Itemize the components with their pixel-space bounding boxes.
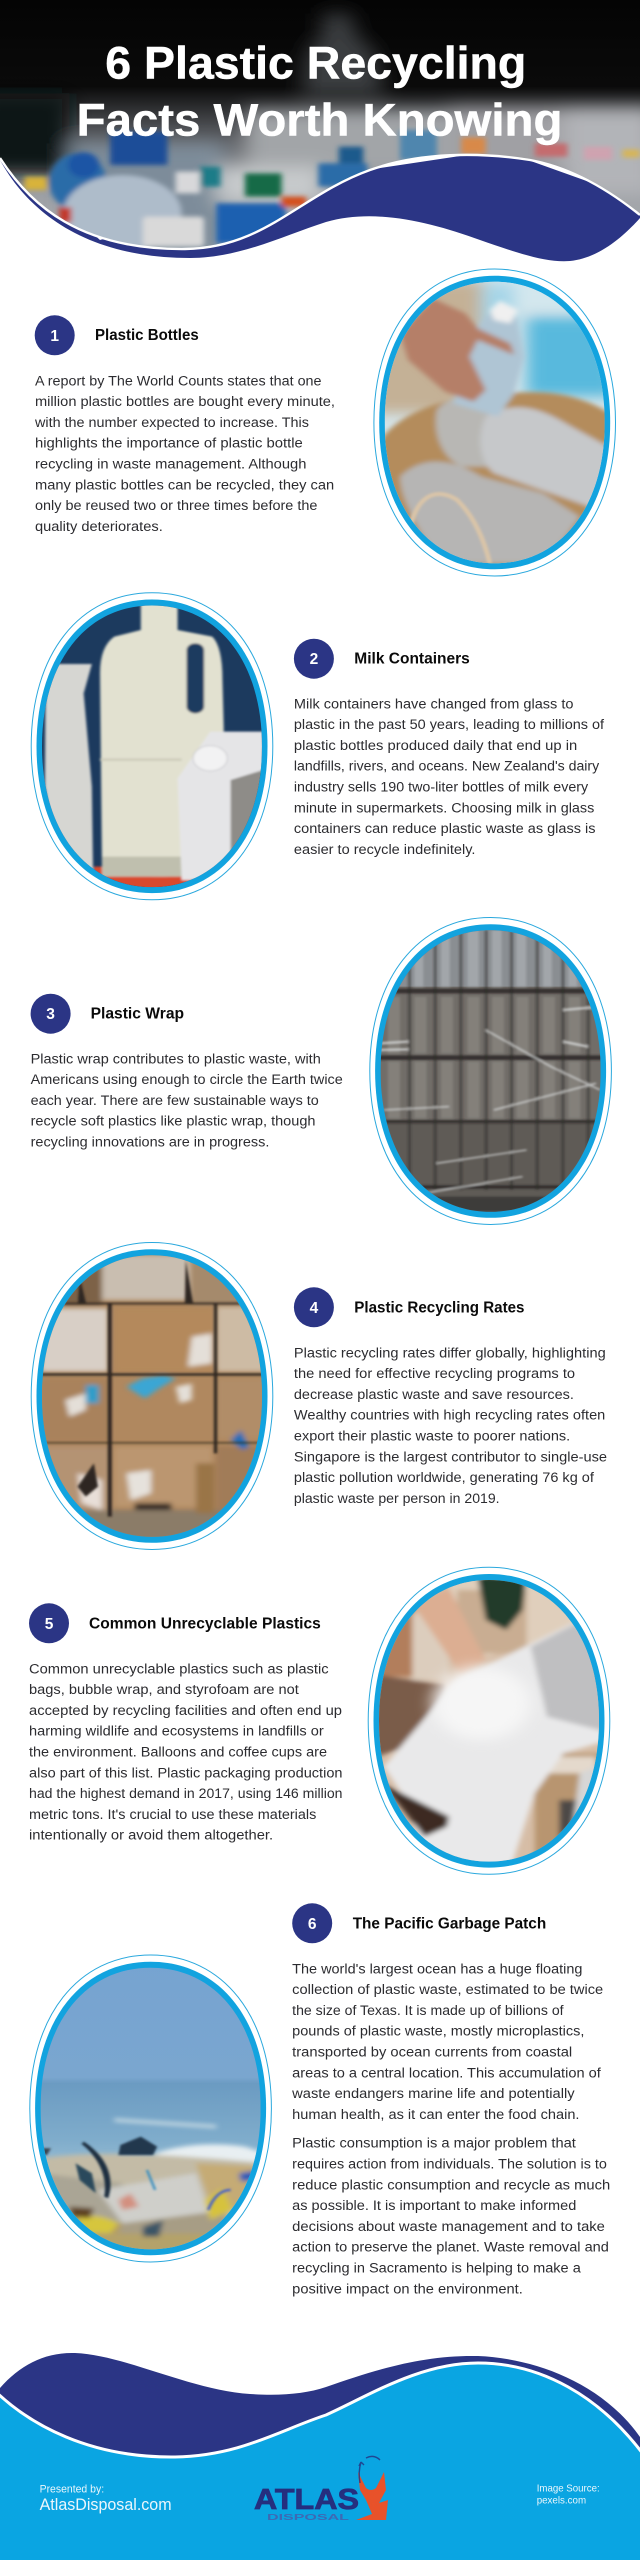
text block: plastic wrap: each year. There are few sustainable ways to — [31, 1093, 319, 1108]
heading: plastic recycling rates: Plastic Recycling Rates — [354, 1299, 524, 1316]
number badge 1 — [35, 315, 75, 355]
blue footer background — [0, 2363, 640, 2560]
number badge 6 — [292, 1903, 332, 1943]
text block: ocean plastic paragraph: The world's largest ocean has a huge floating — [292, 1961, 582, 1976]
panel: the pacific garbage patch — [24, 1903, 610, 2296]
text block: plastic bottles — [34, 373, 335, 534]
number badge 1: 1 — [50, 328, 59, 345]
number badge 4: 4 — [310, 1300, 319, 1317]
text block: plastic bottles: highlights the importance of plastic bottle — [35, 436, 303, 451]
text block: consumption paragraph: Plastic consumption is a major problem that — [292, 2136, 576, 2151]
text block: ocean plastic paragraph: areas to a central location. This accumulation of — [292, 2065, 601, 2080]
number badge 5: 5 — [45, 1616, 54, 1633]
panel: plastic bottles — [34, 269, 620, 576]
text block: milk containers: plastic bottles produced daily that end up in — [294, 738, 577, 753]
number badge 4 — [294, 1287, 334, 1327]
text block: plastic recycling rates: export their plastic waste to poorer nations. — [294, 1428, 570, 1444]
text block: plastic bottles: many plastic bottles can be recycled, they can — [35, 477, 334, 492]
text block: plastic recycling rates: the need for effective recycling programs to — [294, 1366, 575, 1381]
text block: ocean plastic paragraph: the size of Texas. It is made up of billions of — [292, 2003, 564, 2018]
text block: common unrecyclable plastics: had the highest demand in 2017, using 146 million — [29, 1786, 342, 1801]
text block: common unrecyclable plastics: bags, bubble wrap, and styrofoam are not — [29, 1682, 299, 1697]
text block: plastic wrap: recycle soft plastics like plastic wrap, though — [31, 1114, 315, 1129]
photo: plastic milk jugs — [24, 590, 286, 900]
text block: milk containers: Milk containers have changed from glass to — [294, 696, 574, 711]
text block: plastic wrap: Americans using enough to circle the Earth twice — [31, 1072, 343, 1087]
text block: plastic recycling rates: Singapore is the largest contributor to single-use — [294, 1449, 607, 1464]
text block: common unrecyclable plastics: accepted by recycling facilities and often end up — [29, 1703, 342, 1718]
text block: plastic recycling rates: decrease plastic waste and save resources. — [294, 1387, 574, 1402]
panel: milk containers — [24, 590, 604, 900]
text block: plastic bottles: quality deteriorates. — [35, 519, 163, 534]
text block: ocean plastic paragraph: waste endangers marine life and potentially — [291, 2086, 575, 2101]
image source credit: Image Source: — [537, 2483, 600, 2495]
text block: common unrecyclable plastics: metric tons. It's crucial to use these materials — [29, 1807, 317, 1822]
title: Facts Worth Knowing — [77, 95, 562, 146]
white header wave line — [0, 155, 640, 249]
logo subline: DISPOSAL — [267, 2513, 349, 2522]
text block: common unrecyclable plastics — [29, 1661, 342, 1843]
text block: milk containers: easier to recycle indefinitely. — [294, 842, 476, 857]
text block: ocean plastic paragraph — [291, 1961, 603, 2122]
text block: plastic recycling rates: plastic pollution worldwide, generating 76 kg of — [294, 1470, 594, 1485]
text block: milk containers: landfills, rivers, and oceans. New Zealand's dairy — [294, 759, 599, 774]
text block: consumption paragraph: reduce plastic consumption and recycle as much — [292, 2177, 610, 2192]
text block: plastic bottles: with the number expected to increase. This — [34, 415, 309, 430]
number badge 2: 2 — [310, 651, 318, 668]
header photo: plastic bottles — [0, 0, 640, 262]
text block: common unrecyclable plastics: also part of this list. Plastic packaging production — [29, 1765, 342, 1780]
number badge 3 — [31, 994, 71, 1034]
footer — [0, 2353, 640, 2560]
text block: consumption paragraph: positive impact on the environment. — [292, 2281, 523, 2296]
number badge 5 — [29, 1603, 69, 1643]
text block: milk containers: containers can reduce plastic waste as glass is — [294, 821, 596, 836]
text block: ocean plastic paragraph: pounds of plastic waste, mostly microplastics, — [292, 2024, 584, 2039]
photo: plastic waste on a beach — [24, 1953, 286, 2263]
image source credit — [537, 2483, 600, 2506]
text block: plastic wrap: recycling innovations are in progress. — [31, 1134, 269, 1150]
text block: plastic wrap: Plastic wrap contributes to plastic waste, with — [31, 1051, 321, 1066]
text block: consumption paragraph: decisions about waste management and to take — [292, 2219, 605, 2234]
text block: plastic wrap — [31, 1051, 343, 1150]
number badge 2 — [294, 639, 334, 679]
text block: consumption paragraph — [292, 2136, 610, 2296]
text block: plastic bottles: million plastic bottles are bought every minute, — [35, 394, 335, 409]
text block: plastic recycling rates — [294, 1345, 607, 1506]
text block: consumption paragraph: action to preserve the planet. Waste removal and — [292, 2240, 609, 2255]
text block: common unrecyclable plastics: intentionally or avoid them altogether. — [29, 1828, 273, 1843]
text block: ocean plastic paragraph: human health, as it can enter the food chain. — [292, 2107, 580, 2122]
presented by credit: Presented by: — [40, 2484, 104, 2496]
number badge 6: 6 — [308, 1916, 317, 1933]
text block: plastic recycling rates: Plastic recycling rates differ globally, highlighting — [294, 1345, 606, 1360]
photo: bubble wrap roll — [367, 1567, 620, 1874]
header banner — [0, 0, 640, 262]
text block: common unrecyclable plastics: harming wildlife and ecosystems in landfills or — [29, 1724, 324, 1739]
photo: shrink-wrapped cans — [367, 918, 620, 1224]
number badge 3: 3 — [46, 1006, 55, 1023]
text block: milk containers: industry sells 190 two-liter bottles of milk every — [294, 780, 588, 794]
text block: plastic bottles: recycling in waste management. Although — [35, 456, 306, 472]
text block: ocean plastic paragraph: transported by ocean currents from coastal — [292, 2044, 572, 2060]
heading: common unrecyclable plastics: Common Unrecyclable Plastics — [89, 1615, 321, 1632]
text block: plastic recycling rates: plastic waste per person in 2019. — [294, 1491, 500, 1506]
heading: milk containers: Milk Containers — [354, 650, 470, 667]
text block: plastic bottles: A report by The World Counts states that one — [35, 373, 322, 388]
logo: Atlas Disposal — [254, 2456, 388, 2522]
logo figure — [356, 2472, 388, 2520]
text block: consumption paragraph: recycling in Sacramento is helping to make a — [292, 2260, 581, 2276]
text block: plastic recycling rates: Wealthy countries with high recycling rates often — [294, 1408, 605, 1423]
logo globe arrow — [359, 2456, 380, 2483]
text block: consumption paragraph: requires action from individuals. The solution is to — [292, 2156, 607, 2172]
text block: plastic bottles: only be reused two or three times before the — [35, 498, 317, 513]
panel: common unrecyclable plastics — [29, 1567, 620, 1874]
navy footer wave — [0, 2353, 640, 2470]
heading: the pacific garbage patch: The Pacific Garbage Patch — [353, 1915, 546, 1932]
heading: plastic wrap: Plastic Wrap — [91, 1006, 184, 1023]
heading: plastic bottles: Plastic Bottles — [95, 327, 199, 344]
text block: milk containers — [294, 696, 604, 857]
navy header wave — [0, 150, 640, 261]
presented by credit: AtlasDisposal.com — [40, 2496, 172, 2514]
photo: hand and plastic bottles in basket — [367, 269, 620, 576]
text block: common unrecyclable plastics: Common unrecyclable plastics such as plastic — [29, 1661, 329, 1676]
presented by credit — [40, 2484, 172, 2514]
logo wordmark: ATLAS — [254, 2484, 359, 2516]
title: 6 Plastic Recycling — [105, 38, 526, 89]
text block: ocean plastic paragraph: collection of plastic waste, estimated to be twice — [292, 1982, 603, 1997]
text block: milk containers: minute in supermarkets. Choosing milk in glass — [294, 800, 595, 815]
photo: baled cardboard and plastic — [24, 1240, 286, 1550]
text block: common unrecyclable plastics: the environment. Balloons and coffee cups are — [29, 1744, 327, 1760]
text block: milk containers: plastic in the past 50 years, leading to millions of — [294, 717, 604, 732]
image source credit: pexels.com — [537, 2494, 586, 2506]
panel: plastic wrap — [31, 918, 620, 1224]
title — [77, 38, 562, 146]
text block: consumption paragraph: as possible. It is important to make informed — [292, 2198, 576, 2213]
panel: plastic recycling rates — [24, 1240, 607, 1550]
